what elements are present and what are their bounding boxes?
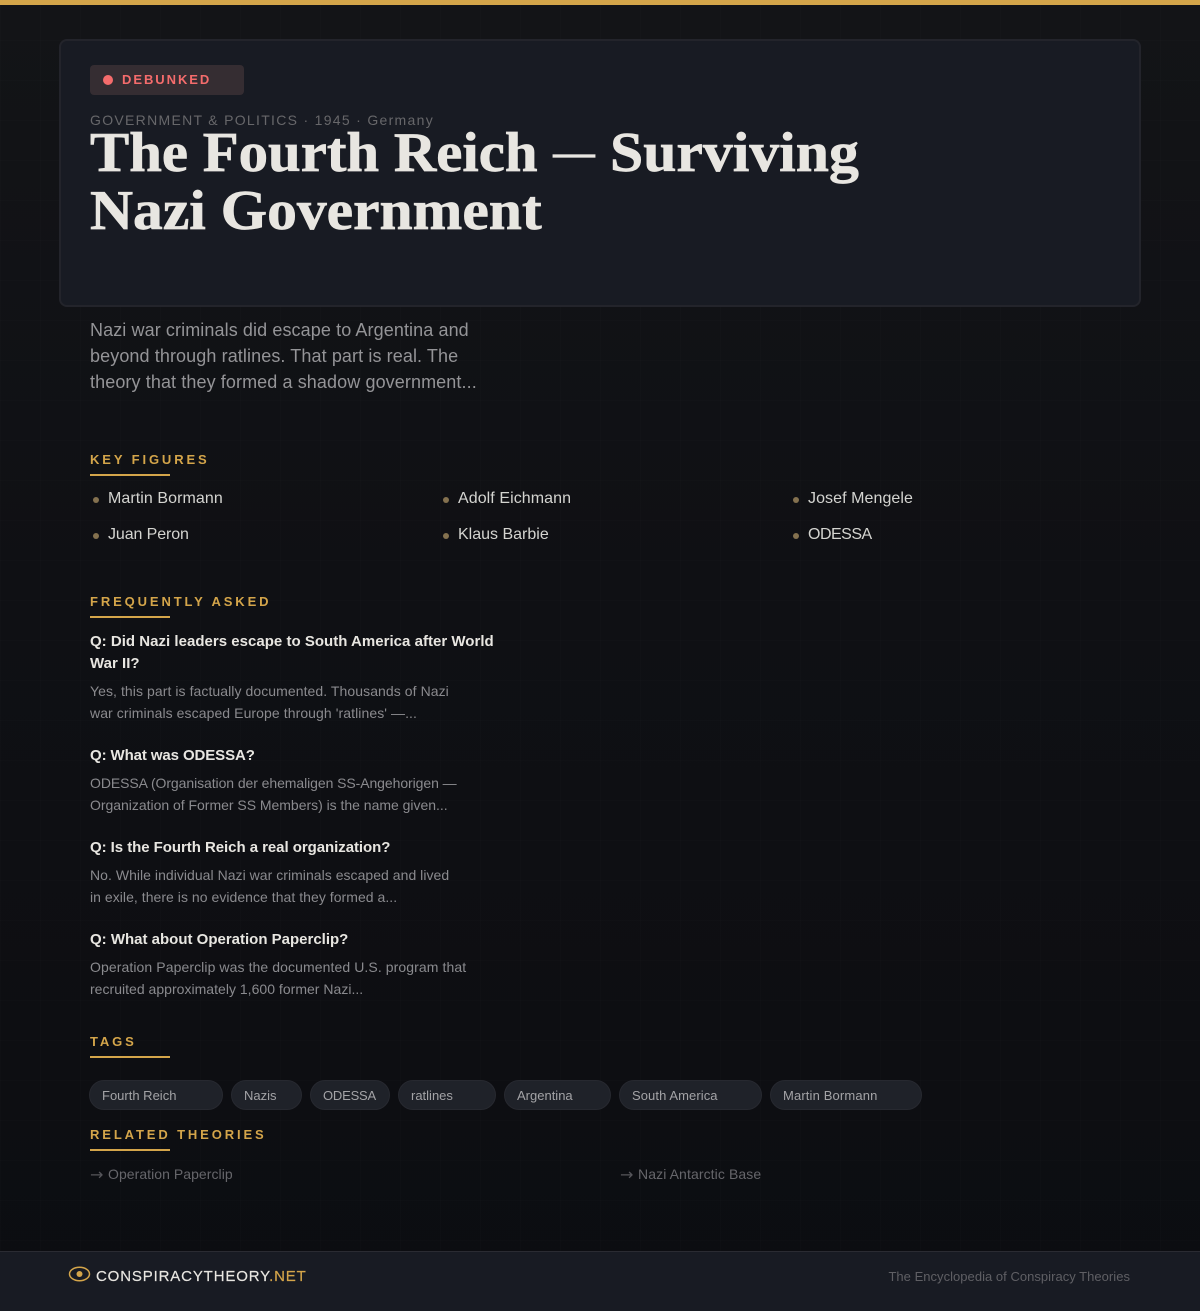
heading: tags: TAGS bbox=[90, 1034, 137, 1049]
figure: Martin Bormann: Martin Bormann bbox=[108, 490, 223, 507]
badge dot bbox=[103, 75, 113, 85]
footer tagline: The Encyclopedia of Conspiracy Theories bbox=[888, 1269, 1130, 1284]
answer 2: ODESSA (Organisation der ehemaligen SS-Angehorigen — bbox=[90, 775, 457, 791]
title: Surviving bbox=[610, 122, 859, 184]
figure: Adolf Eichmann: Adolf Eichmann bbox=[458, 490, 571, 507]
heading: frequently asked: FREQUENTLY ASKED bbox=[90, 594, 271, 609]
tag: Fourth Reich: Fourth Reich bbox=[102, 1088, 176, 1103]
tag: ratlines bbox=[398, 1080, 496, 1110]
category meta line: GOVERNMENT & POLITICS · 1945 · Germany bbox=[90, 112, 434, 128]
question 1: Q: Did Nazi leaders escape to South America after World bbox=[90, 633, 494, 650]
question 3: Q: Is the Fourth Reich a real organization? bbox=[90, 839, 390, 856]
figure: Klaus Barbie: Klaus Barbie bbox=[458, 526, 549, 543]
figure: ODESSA: ODESSA bbox=[808, 526, 872, 543]
question 4: Q: What about Operation Paperclip? bbox=[90, 931, 348, 948]
related link: Nazi Antarctic Base: → bbox=[620, 1165, 634, 1184]
tag: ODESSA bbox=[310, 1080, 390, 1110]
figure: Juan Peron: Juan Peron bbox=[108, 526, 189, 543]
answer 4 bbox=[90, 959, 466, 997]
title: — bbox=[553, 130, 595, 176]
top accent bar bbox=[0, 0, 1200, 5]
tag: Argentina: Argentina bbox=[517, 1088, 573, 1103]
answer 3: No. While individual Nazi war criminals escaped and lived bbox=[90, 867, 449, 883]
summary text bbox=[90, 320, 477, 392]
summary text: beyond through ratlines. That part is real. The bbox=[90, 346, 458, 366]
panel: hero header bbox=[59, 39, 1141, 307]
question 1: War II? bbox=[90, 655, 140, 672]
answer 1: Yes, this part is factually documented. Thousands of Nazi bbox=[90, 683, 449, 699]
related link: Operation Paperclip: → bbox=[90, 1165, 103, 1184]
answer 3 bbox=[90, 867, 449, 905]
answer 4: Operation Paperclip was the documented U.S. program that bbox=[90, 959, 466, 975]
related link: Operation Paperclip: Operation Paperclip bbox=[108, 1166, 233, 1182]
answer 1 bbox=[90, 683, 449, 721]
related link: Nazi Antarctic Base: Nazi Antarctic Base bbox=[638, 1166, 761, 1182]
answer 2: Organization of Former SS Members) is the name given... bbox=[90, 797, 448, 813]
summary text: theory that they formed a shadow government... bbox=[90, 372, 477, 392]
tag: ODESSA: ODESSA bbox=[323, 1088, 376, 1103]
figure: Josef Mengele: Josef Mengele bbox=[808, 490, 913, 507]
tag: Martin Bormann: Martin Bormann bbox=[783, 1088, 877, 1103]
footer wordmark: CONSPIRACYTHEORY.NET bbox=[96, 1268, 307, 1284]
answer 4: recruited approximately 1,600 former Nazi... bbox=[90, 981, 363, 997]
tag: Argentina bbox=[504, 1080, 611, 1110]
badge label: DEBUNKED bbox=[122, 72, 211, 87]
tag: Fourth Reich bbox=[89, 1080, 223, 1110]
answer 1: war criminals escaped Europe through 'ratlines' —... bbox=[90, 705, 417, 721]
icon: eye logo bbox=[68, 1266, 90, 1282]
heading: related theories: RELATED THEORIES bbox=[90, 1127, 267, 1142]
footer bbox=[0, 1251, 1200, 1311]
answer 3: in exile, there is no evidence that they formed a... bbox=[90, 889, 397, 905]
tag: ratlines: ratlines bbox=[411, 1088, 453, 1103]
tag: South America bbox=[619, 1080, 762, 1110]
title bbox=[90, 122, 859, 242]
tag: Nazis: Nazis bbox=[244, 1088, 277, 1103]
badge: debunked bbox=[90, 65, 244, 95]
tag: South America: South America bbox=[632, 1088, 718, 1103]
heading: key figures: KEY FIGURES bbox=[90, 452, 210, 467]
tag: Martin Bormann bbox=[770, 1080, 922, 1110]
question 1 bbox=[90, 633, 494, 672]
question 2: Q: What was ODESSA? bbox=[90, 747, 255, 764]
title: The Fourth Reich bbox=[90, 122, 538, 184]
title: Nazi Government bbox=[90, 180, 542, 242]
tag: Nazis bbox=[231, 1080, 302, 1110]
summary text: Nazi war criminals did escape to Argentina and bbox=[90, 320, 469, 340]
answer 2 bbox=[90, 775, 457, 813]
